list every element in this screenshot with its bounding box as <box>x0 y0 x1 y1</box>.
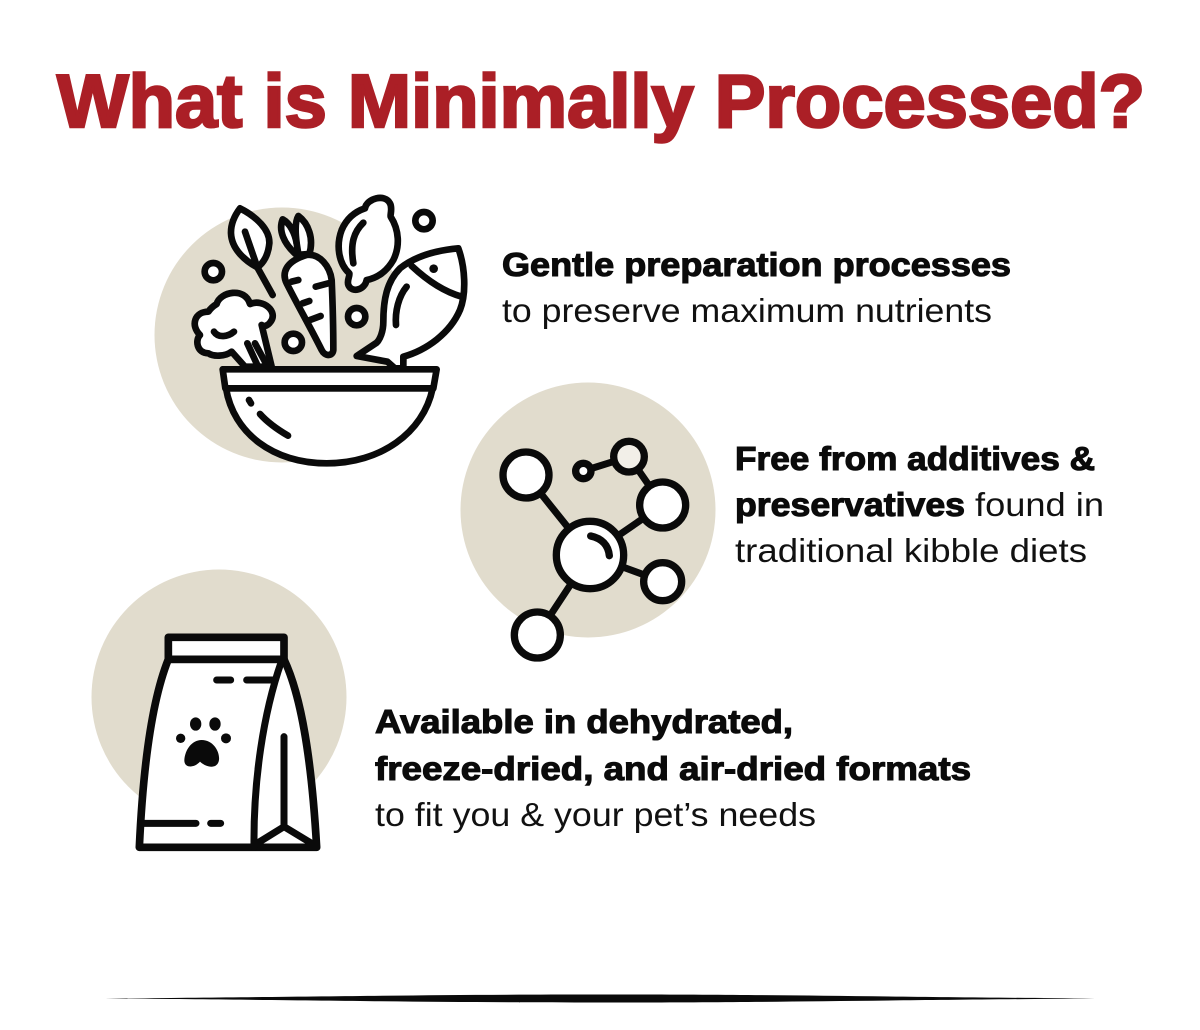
text: available formats: freeze-dried, and air-dried formats <box>375 750 971 787</box>
icon: food bowl <box>195 198 464 463</box>
background circle: bag <box>92 570 346 824</box>
atom highlight <box>591 536 609 556</box>
lemon <box>339 198 398 290</box>
icon: paw print <box>176 717 231 767</box>
text: gentle preparation: to preserve maximum nutrients <box>502 292 992 329</box>
bag top seal <box>168 637 284 659</box>
small dots <box>205 212 433 351</box>
bottom divider <box>105 994 1095 1002</box>
carrot <box>281 216 333 355</box>
bowl <box>223 369 437 463</box>
text: free from additives: preservatives <box>735 486 965 523</box>
icon: molecule <box>503 441 686 658</box>
broccoli <box>195 293 273 367</box>
bag folds and dashes <box>141 662 313 847</box>
title: What is Minimally Processed? <box>57 59 1145 143</box>
text: free from additives: traditional kibble diets <box>735 532 1087 569</box>
text: free from additives: found in <box>975 486 1104 523</box>
text: gentle preparation <box>502 246 1011 329</box>
text: free from additives: Free from additives & <box>735 440 1095 477</box>
leaf <box>231 208 273 295</box>
text: available formats <box>375 703 971 833</box>
background circle: food <box>154 208 410 462</box>
text: available formats: to fit you & your pet’s needs <box>375 796 816 833</box>
text: available formats: Available in dehydrated, <box>375 703 793 740</box>
bag body <box>139 659 317 847</box>
background circle: molecule <box>460 382 716 638</box>
icon: pet food bag <box>139 637 317 847</box>
text: gentle preparation: Gentle preparation processes <box>502 246 1011 283</box>
text: free from additives <box>735 440 1104 569</box>
fish <box>357 248 464 368</box>
atoms <box>503 441 686 658</box>
bonds <box>526 457 663 635</box>
